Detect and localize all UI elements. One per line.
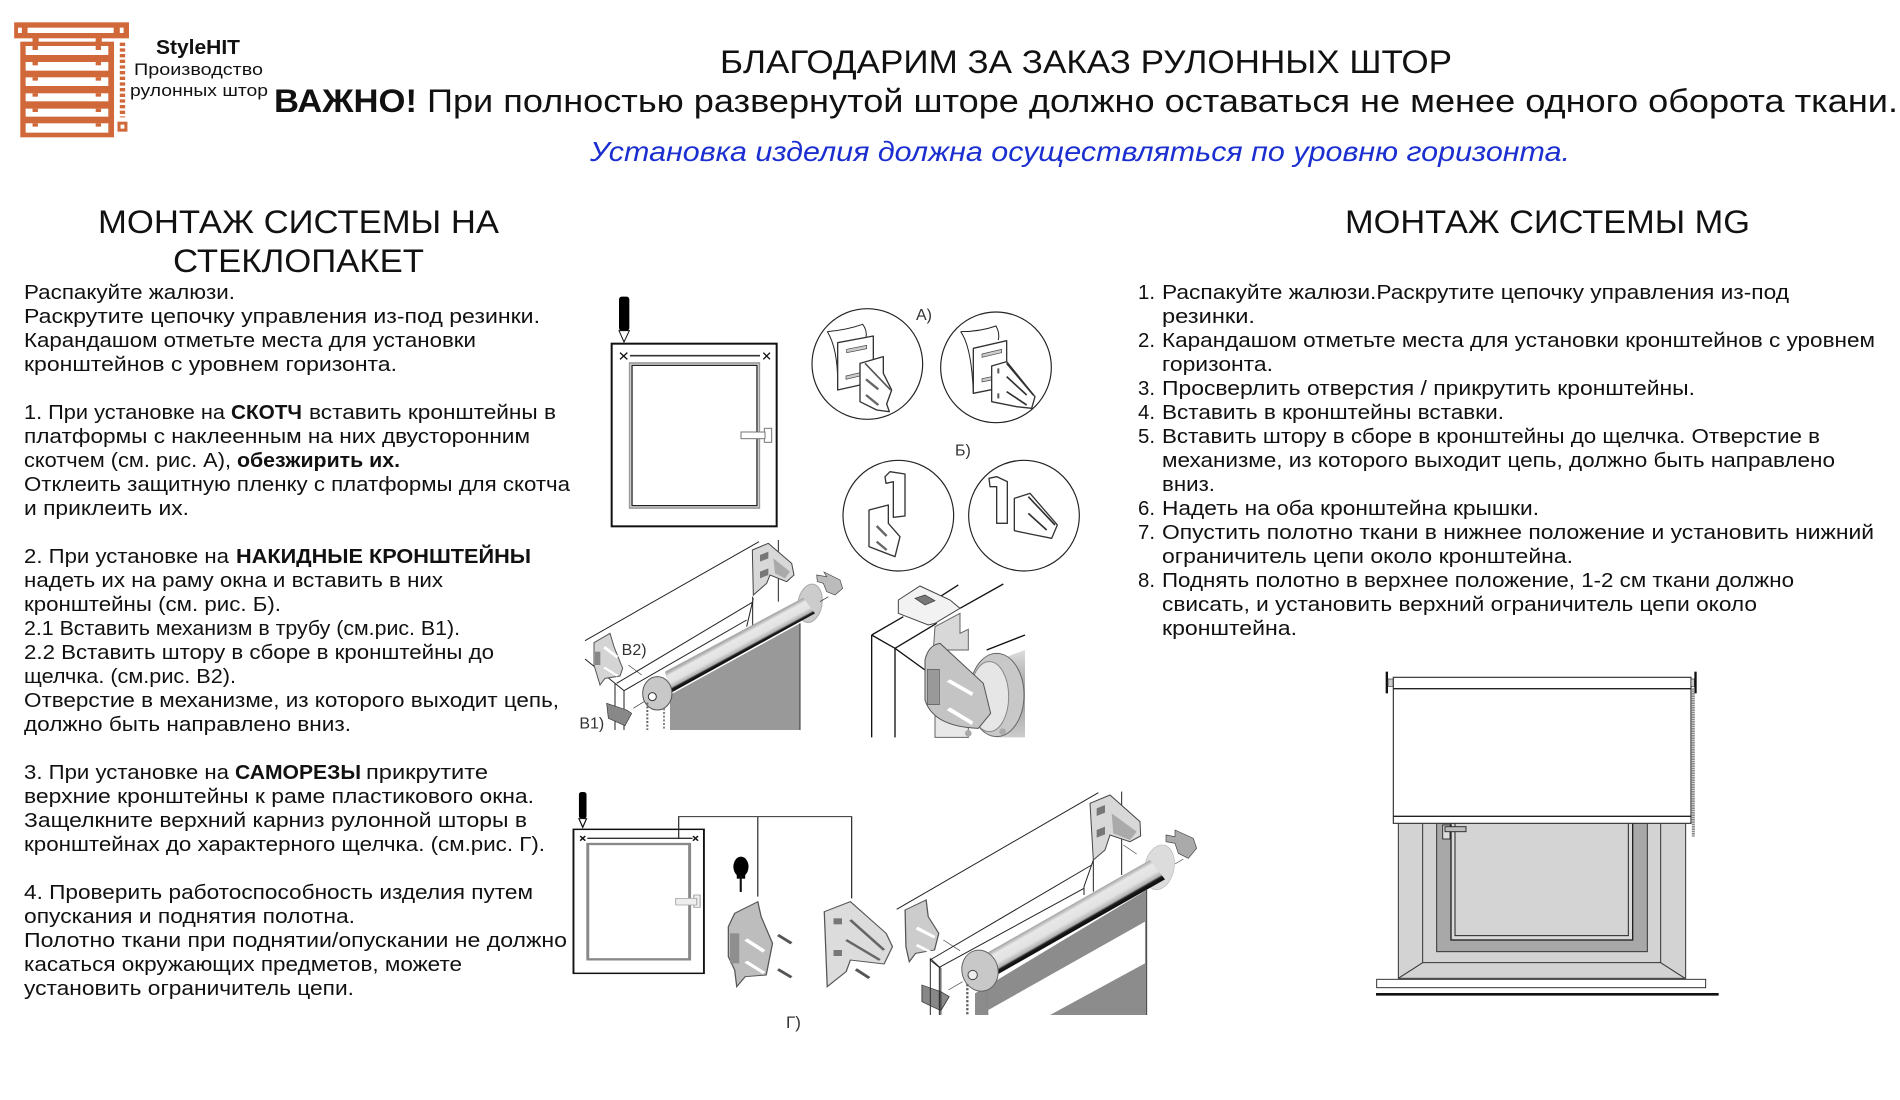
text block: glass unit instructions: 3. При установке на [24,762,230,784]
numbered list: MG instructions: 1. [1138,282,1155,304]
label В2: В2) [622,642,647,659]
text block: glass unit instructions: 1. При установке на [24,402,226,424]
numbered list: MG instructions: кронштейна. [1162,618,1297,640]
icon: pencil [619,297,629,342]
numbered list: MG instructions: Карандашом отметьте места для установки кронштейнов с уровнем [1162,330,1875,352]
numbered list: MG instructions: 5. [1138,426,1155,448]
text block: glass unit instructions: кронштейнов с уровнем горизонта. [24,354,397,376]
numbered list: MG instructions: Надеть на оба кронштейна крышки. [1162,498,1539,520]
text block: glass unit instructions: опускания и поднятия полотна. [24,906,355,928]
label Б: Б) [955,443,971,460]
icon: roller blind [14,22,129,137]
numbered list: MG instructions: Просверлить отверстия / прикрутить кронштейны. [1162,378,1695,400]
text block: glass unit instructions: 4. Проверить работоспособность изделия путем [24,882,533,904]
logo: StyleHIT [14,22,268,137]
numbered list: MG instructions: Распакуйте жалюзи.Раскрутите цепочку управления из-под [1162,282,1789,304]
heading: glass unit mounting: СТЕКЛОПАКЕТ [173,243,424,279]
text block: glass unit instructions: кронштейны (см. рис. Б). [24,594,281,616]
text block: glass unit instructions: касаться окружающих предметов, можете [24,954,462,976]
circle: hook bracket 2 [969,460,1079,571]
numbered list: MG instructions: Вставить в кронштейны вставки. [1162,402,1504,424]
numbered list: MG instructions: Поднять полотно в верхнее положение, 1-2 см ткани должно [1162,570,1794,592]
blind [1386,672,1697,837]
text block: glass unit instructions: 2.1 Вставить механизм в трубу (см.рис. В1). [24,618,460,640]
text block: glass unit instructions: скотчем (см. рис. А), [24,450,231,472]
numbered list: MG instructions: вниз. [1162,474,1215,496]
window frame with marks [573,829,704,973]
bracket with cover and screws [728,902,791,987]
text block: glass unit instructions: СКОТЧ [231,402,302,424]
text block: glass unit instructions: 2.2 Вставить штору в сборе в кронштейны до [24,642,494,664]
label А: А) [916,307,932,324]
important notice: При полностью развернутой шторе должно оставаться не менее одного оборота ткани. [427,83,1898,119]
illustration: window marking and brackets A, Б, В [579,297,1079,737]
illustration: roller with striped fabric [897,792,1197,1015]
text block: glass unit instructions: Отверстие в механизме, из которого выходит цепь, [24,690,559,712]
numbered list: MG instructions: 7. [1138,522,1155,544]
numbered list: MG instructions: резинки. [1162,306,1255,328]
text block: glass unit instructions: Полотно ткани при поднятии/опускании не должно [24,930,567,952]
label В1: В1) [579,715,604,732]
connector lines [679,817,852,898]
text block: glass unit instructions: НАКИДНЫЕ КРОНШТЕЙНЫ [236,544,531,568]
numbered list: MG instructions: горизонта. [1162,354,1273,376]
circle: tape bracket 1 [812,309,923,419]
illustration: screw mounting Г [573,792,949,1015]
window recess [1376,822,1719,994]
icon: pencil [579,792,587,827]
title: thanks: БЛАГОДАРИМ ЗА ЗАКАЗ РУЛОННЫХ ШТОР [720,44,1452,80]
bracket open [824,902,892,987]
text block: glass unit instructions: установить ограничитель цепи. [24,978,354,1000]
text block: glass unit instructions: надеть их на раму окна и вставить в них [24,570,443,592]
numbered list: MG instructions: 6. [1138,498,1155,520]
text block: glass unit instructions: Раскрутите цепочку управления из-под резинки. [24,306,540,328]
numbered list: MG instructions: 3. [1138,378,1155,400]
numbered list: MG instructions: ограничитель цепи около кронштейна. [1162,546,1573,568]
small bracket left of roller [905,900,949,1015]
text block: glass unit instructions: Карандашом отметьте места для установки [24,330,476,352]
heading: glass unit mounting [98,204,500,279]
label Г: Г) [786,1013,801,1032]
text block: glass unit instructions: должно быть направлено вниз. [24,714,351,736]
text block: glass unit instructions: Распакуйте жалюзи. [24,282,235,304]
text block: glass unit instructions: верхние кронштейны к раме пластикового окна. [24,786,534,808]
text block: glass unit instructions: Защелкните верхний карниз рулонной шторы в [24,810,527,832]
text block: glass unit instructions: платформы с наклеенным на них двусторонним [24,426,530,448]
text block: glass unit instructions: щелчка. (см.рис. В2). [24,666,236,688]
circle: hook bracket 1 [843,460,954,571]
numbered list: MG instructions: Опустить полотно ткани в нижнее положение и установить нижний [1162,522,1874,544]
numbered list: MG instructions: свисать, и установить верхний ограничитель цепи около [1162,594,1757,616]
text block: glass unit instructions: САМОРЕЗЫ [235,762,361,784]
text block: glass unit instructions: 2. При установке на [24,546,230,568]
text block: glass unit instructions: обезжирить их. [237,450,400,472]
text block: glass unit instructions: прикрутите [366,762,488,784]
brand name: StyleHIT [156,37,240,59]
circle: tape bracket 2 [941,312,1051,423]
icon: screwdriver [733,857,749,892]
heading: MG system mounting: МОНТАЖ СИСТЕМЫ MG [1345,204,1750,240]
numbered list: MG instructions: механизме, из которого выходит цепь, должно быть направлено [1162,450,1835,472]
roller assembly B1 / B2 [579,540,843,732]
text block: glass unit instructions: кронштейнах до характерного щелчка. (см.рис. Г). [24,834,545,856]
text block: glass unit instructions: вставить кронштейны в [309,402,556,424]
numbered list: MG instructions: 4. [1138,402,1155,424]
text block: glass unit instructions [24,282,571,1000]
window frame with marks [612,344,777,526]
numbered list: MG instructions: Вставить штору в сборе в кронштейны до щелчка. Отверстие в [1162,426,1820,448]
closeup: bracket on frame [872,584,1025,737]
text block: glass unit instructions: Отклеить защитную пленку с платформы для скотча [24,474,571,496]
numbered list: MG instructions [1138,282,1875,640]
numbered list: MG instructions: 8. [1138,570,1155,592]
numbered list: MG instructions: 2. [1138,330,1155,352]
important notice: ВАЖНО! [274,83,417,119]
illustration: MG system roller blind over window [1376,672,1719,994]
brand tagline [130,60,268,100]
heading: glass unit mounting: МОНТАЖ СИСТЕМЫ НА [98,204,500,240]
brand tagline: рулонных штор [130,81,268,100]
brand tagline: Производство [134,60,263,79]
text block: glass unit instructions: и приклеить их. [24,498,189,520]
horizon level note: Установка изделия должна осуществляться по уровню горизонта. [589,136,1570,167]
